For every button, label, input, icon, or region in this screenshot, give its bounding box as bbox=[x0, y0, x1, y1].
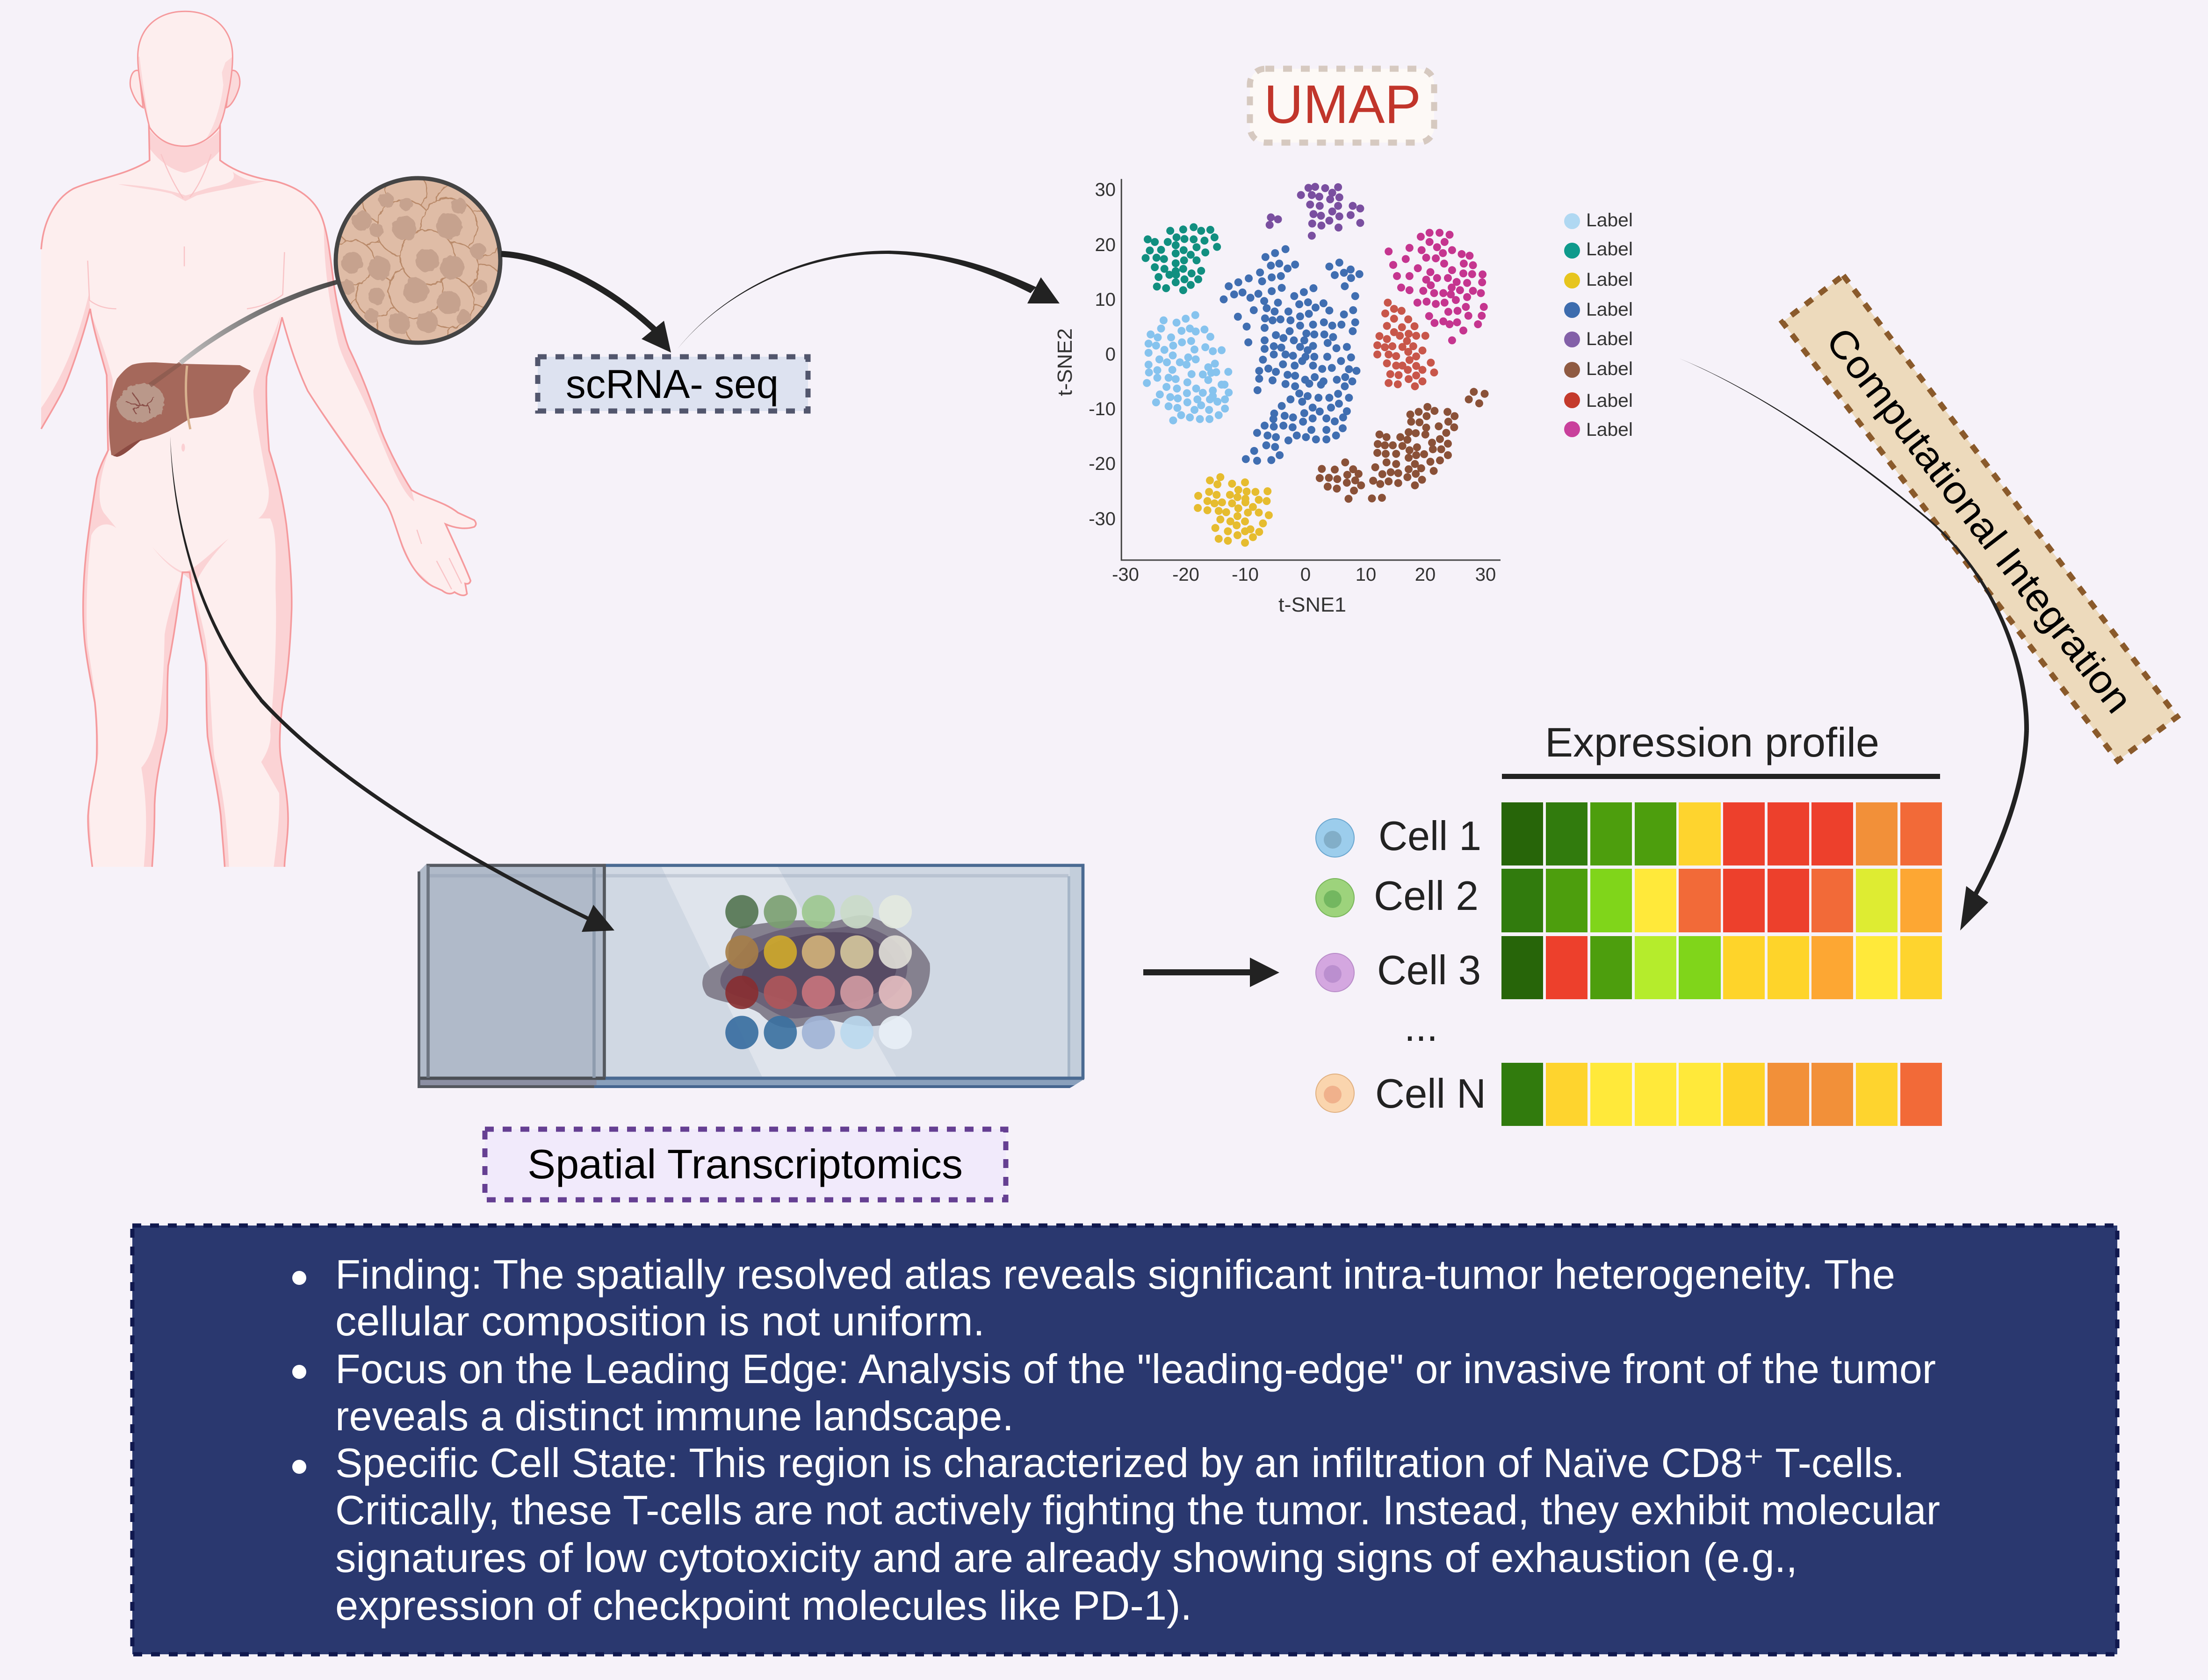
y axis tick labels: -30 bbox=[1089, 509, 1116, 529]
x axis tick labels: -30 bbox=[1112, 564, 1139, 585]
barcoded spot grid bbox=[725, 895, 912, 1049]
text: ellipsis: ... bbox=[1404, 1003, 1438, 1050]
icon: cell 2 bbox=[1316, 879, 1354, 917]
y axis tick labels: -10 bbox=[1089, 399, 1116, 419]
scatter points bbox=[1146, 187, 1485, 543]
text: leading edge: Focus on the Leading Edge: Analysis of the "leading-edge" or invasive front of the tumor bbox=[335, 1346, 1936, 1392]
y axis tick labels: 20 bbox=[1095, 235, 1116, 255]
text: Cell 1: Cell 1 bbox=[1378, 813, 1481, 859]
bullet 1 bbox=[292, 1271, 306, 1285]
y axis tick labels bbox=[1089, 180, 1116, 529]
text: Cell 2: Cell 2 bbox=[1374, 872, 1479, 919]
chart legend: Label bbox=[1586, 269, 1633, 290]
heatmap row: cell N bbox=[1501, 1063, 1942, 1126]
arrow: UMAP to expression profile bbox=[1679, 358, 2029, 930]
label: Computational Integration: Computational Integration bbox=[1818, 319, 2141, 721]
tumor mass bbox=[117, 383, 164, 423]
chart legend bbox=[1564, 210, 1633, 440]
text: Cell N: Cell N bbox=[1375, 1070, 1486, 1117]
y axis title: t-SNE2 bbox=[1053, 328, 1076, 396]
label: Computational Integration bbox=[1782, 275, 2177, 761]
arrow: slide to expression profile bbox=[1143, 958, 1279, 987]
x axis tick labels: 30 bbox=[1475, 564, 1496, 585]
x axis title: t-SNE1 bbox=[1278, 593, 1346, 616]
connector: liver to tissue zoom bbox=[148, 279, 339, 387]
chart legend: Label bbox=[1586, 210, 1633, 231]
label: UMAP: UMAP bbox=[1264, 74, 1421, 135]
illustration: tumor tissue circle bbox=[334, 176, 502, 345]
arrow: tissue to scRNA-seq bbox=[501, 254, 671, 353]
arrow: liver to spatial slide bbox=[170, 436, 614, 932]
chart legend: Label bbox=[1586, 390, 1633, 411]
illustration: liver with tumor bbox=[109, 362, 251, 457]
text: leading edge bbox=[335, 1346, 1936, 1439]
text: finding: cellular composition is not uniform. bbox=[335, 1298, 985, 1344]
label: scRNA-seq: scRNA- seq bbox=[566, 362, 779, 407]
x axis tick labels: -20 bbox=[1172, 564, 1199, 585]
y axis tick labels: -20 bbox=[1089, 454, 1116, 474]
text: finding: Finding: The spatially resolved atlas reveals significant intra-tumor heterogeneity. The bbox=[335, 1251, 1895, 1298]
text: Cell 3: Cell 3 bbox=[1377, 947, 1481, 993]
label: Spatial Transcriptomics: Spatial Transcriptomics bbox=[527, 1141, 963, 1187]
text: cell state: Specific Cell State: This region is characterized by an infiltration of Naïve CD8⁺ T-cells. bbox=[335, 1440, 1905, 1486]
text: cell state bbox=[335, 1440, 1940, 1629]
chart legend: Label bbox=[1586, 359, 1633, 379]
heatmap: expression profile bbox=[1501, 802, 1942, 1126]
icon: cell N bbox=[1316, 1074, 1354, 1112]
heatmap row: cell 1 bbox=[1501, 802, 1942, 865]
chart legend: Label bbox=[1586, 299, 1633, 320]
chart: t-SNE scatter plot bbox=[1053, 179, 1633, 616]
text: cell state: signatures of low cytotoxicity and are already showing signs of exhaustion (e.g., bbox=[335, 1535, 1797, 1581]
text: finding bbox=[335, 1251, 1895, 1344]
text: cell state: Critically, these T-cells are not actively fighting the tumor. Instead, they exhibit molecular bbox=[335, 1487, 1940, 1533]
arrow: scRNA-seq to UMAP plot bbox=[678, 251, 1060, 349]
y axis tick labels: 0 bbox=[1105, 344, 1116, 365]
x axis tick labels: 0 bbox=[1300, 564, 1311, 585]
chart legend: Label bbox=[1586, 239, 1633, 260]
x axis tick labels: 20 bbox=[1415, 564, 1436, 585]
x axis tick labels bbox=[1112, 564, 1496, 585]
heading: Expression profile bbox=[1502, 719, 1940, 779]
label: Spatial Transcriptomics bbox=[485, 1129, 1006, 1200]
panel: key findings bbox=[132, 1226, 2117, 1654]
slide frosted end bbox=[418, 864, 606, 1088]
x axis tick labels: 10 bbox=[1356, 564, 1376, 585]
icon: cell 1 bbox=[1316, 819, 1354, 857]
illustration: spatial transcriptomics slide bbox=[418, 864, 1084, 1088]
text: leading edge: reveals a distinct immune landscape. bbox=[335, 1393, 1014, 1439]
illustration: human body bbox=[41, 11, 476, 867]
cell row labels bbox=[1316, 813, 1486, 1117]
tissue section bbox=[702, 915, 930, 1028]
chart axes bbox=[1121, 179, 1501, 560]
y axis tick labels: 10 bbox=[1095, 289, 1116, 310]
bullet 2 bbox=[292, 1365, 306, 1379]
chart legend: Label bbox=[1586, 419, 1633, 440]
label: scRNA-seq bbox=[538, 357, 808, 411]
heatmap row: cell 3 bbox=[1501, 936, 1942, 999]
chart legend: Label bbox=[1586, 329, 1633, 349]
label: UMAP bbox=[1250, 69, 1434, 143]
x axis tick labels: -10 bbox=[1232, 564, 1259, 585]
heading: Expression profile: Expression profile bbox=[1545, 719, 1879, 765]
y axis tick labels: 30 bbox=[1095, 180, 1116, 200]
bullet 3 bbox=[292, 1460, 306, 1474]
icon: cell 3 bbox=[1316, 953, 1354, 992]
text: cell state: expression of checkpoint molecules like PD-1). bbox=[335, 1582, 1192, 1629]
heatmap row: cell 2 bbox=[1501, 869, 1942, 932]
